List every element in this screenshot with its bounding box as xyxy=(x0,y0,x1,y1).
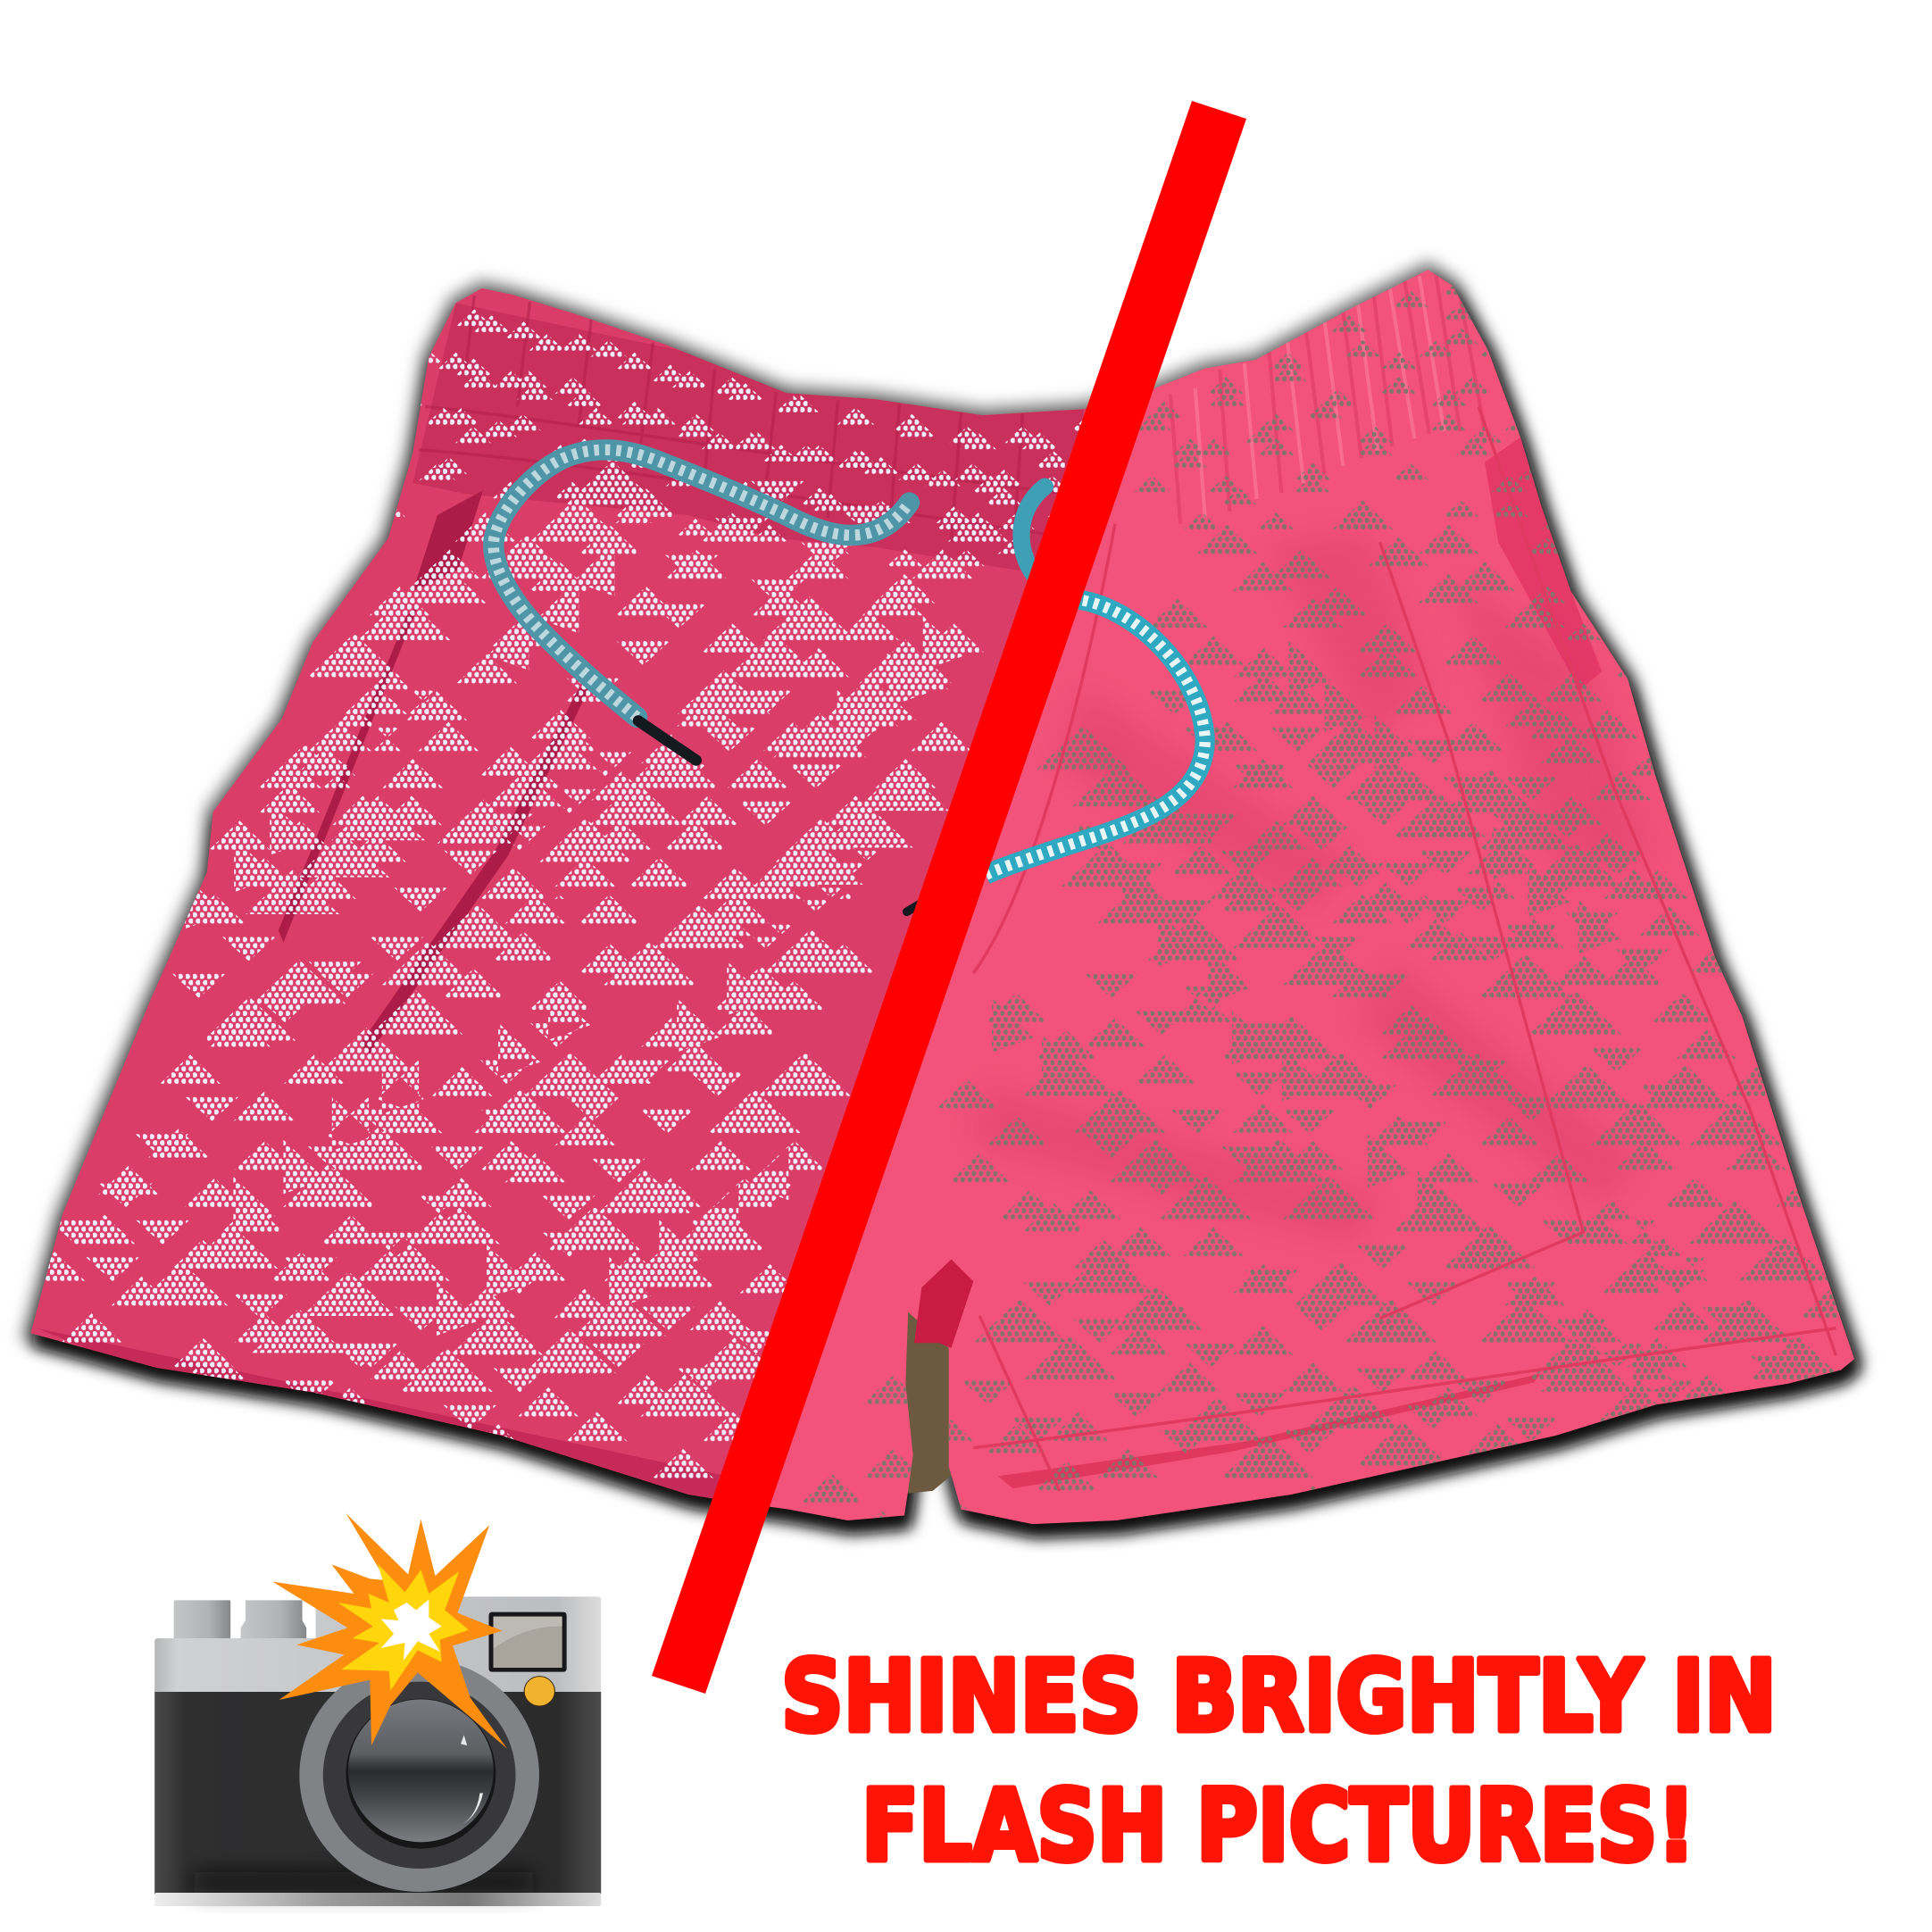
crotch gap xyxy=(904,1306,955,1494)
flash side: white reflective pattern xyxy=(24,272,1120,1510)
camera body xyxy=(154,1692,601,1895)
white triangles flash side xyxy=(74,309,1084,1442)
base fabric, no flash side xyxy=(31,270,1854,1524)
waistband gathers no-flash side xyxy=(1170,271,1485,524)
camera top plate xyxy=(154,1596,601,1694)
yellow button xyxy=(524,1677,554,1706)
camera dials xyxy=(174,1600,306,1639)
waistband gathers flash side xyxy=(419,296,1060,554)
flash burst xyxy=(272,1513,507,1748)
camera bottom chrome xyxy=(154,1893,601,1906)
side pocket panel xyxy=(1485,437,1602,690)
extra white triangle rows xyxy=(24,272,1120,1478)
drawstring no-flash side xyxy=(986,599,1205,875)
caption line 2: FLASH PICTURES! xyxy=(862,1769,1695,1883)
caption headline xyxy=(781,1639,1777,1883)
drawstring flash side xyxy=(494,450,1045,912)
caption line 1: SHINES BRIGHTLY IN xyxy=(781,1639,1777,1753)
shorts drop shadow xyxy=(31,270,1858,1536)
product photo: reflective pink shorts xyxy=(24,241,1861,1540)
camera body shadow xyxy=(195,1872,532,1893)
inner lining xyxy=(914,1259,973,1348)
waistband shading flash side xyxy=(412,304,1084,579)
pocket lines flash side xyxy=(279,490,591,1053)
diagonal red divider xyxy=(652,101,1246,1694)
icon: camera with flash xyxy=(154,1513,601,1906)
pocket and hem stitching xyxy=(973,406,1836,1491)
base fabric, flash side xyxy=(30,288,1087,1498)
no-flash side: grey pattern xyxy=(765,241,1861,1540)
extra grey triangle rows xyxy=(765,241,1861,1540)
viewfinder xyxy=(488,1612,567,1672)
grey triangles no-flash side xyxy=(801,279,1811,1503)
aglet xyxy=(638,720,696,761)
fabric shadows no-flash side xyxy=(973,529,1651,1245)
lens xyxy=(299,1659,539,1892)
